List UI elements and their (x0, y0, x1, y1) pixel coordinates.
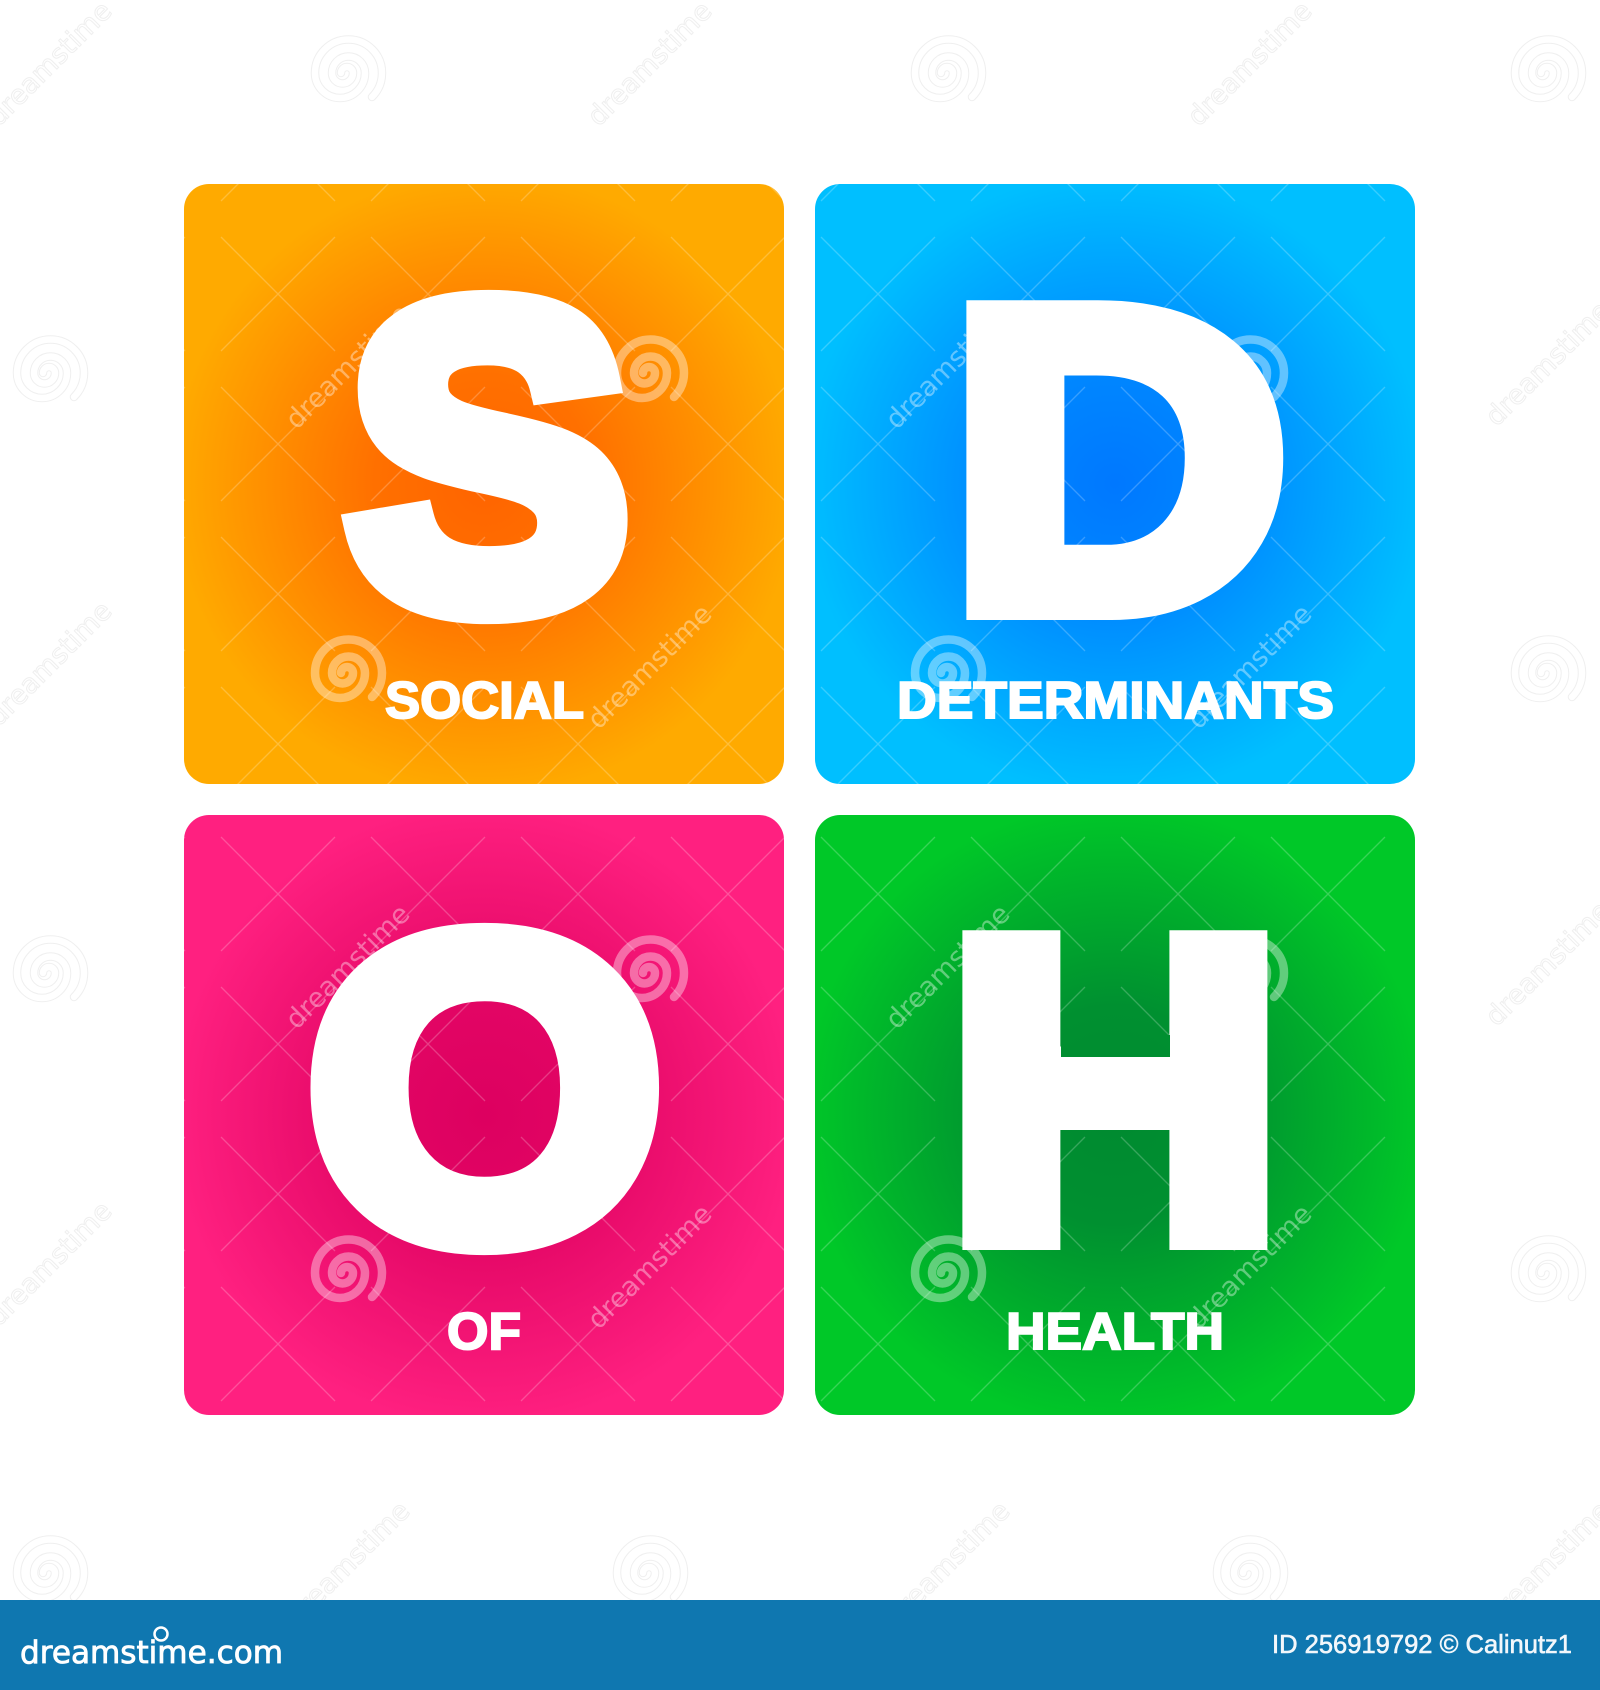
heading letter: S: S (348, 217, 628, 695)
label: DETERMINANTS: DETERMINANTS (897, 672, 1334, 730)
watermark layer over the tiles (184, 184, 1415, 1415)
watermark layer over the tiles: dreamstime (1182, 599, 1318, 735)
heading letter: H: H (947, 854, 1283, 1326)
watermark layer over the tiles: dreamstime (280, 299, 416, 435)
panel: O pink tile background (184, 815, 784, 1415)
panel: D blue tile background (815, 184, 1415, 784)
watermark layer over the tiles: dreamstime (582, 1199, 718, 1335)
label: OF: OF (447, 1303, 521, 1361)
watermark layer over the tiles: dreamstime (1182, 1199, 1318, 1335)
watermark layer over the tiles: dreamstime (880, 299, 1016, 435)
faint watermark layer on white background: dreamstime (280, 1496, 416, 1632)
watermark layer over the tiles: dreamstime (280, 899, 416, 1035)
heading letter: D: D (951, 224, 1287, 696)
label: HEALTH: HEALTH (1006, 1303, 1224, 1361)
faint watermark layer on white background: dreamstime (880, 1496, 1016, 1632)
heading letter: O: O (308, 849, 662, 1327)
footer credit: image ID and author: ID 256919792 © Calinutz1 (1272, 1629, 1572, 1659)
panel: S orange tile background (184, 184, 784, 784)
footer logo text: dreamstime.com: dreamstime.com (20, 1635, 283, 1671)
watermark layer over the tiles: dreamstime (582, 599, 718, 735)
footer bar (0, 1600, 1600, 1690)
panel: H green tile background (815, 815, 1415, 1415)
watermark layer over the tiles: dreamstime (880, 899, 1016, 1035)
icon: footer spiral logo (154, 1628, 168, 1640)
label: SOCIAL: SOCIAL (385, 672, 584, 730)
